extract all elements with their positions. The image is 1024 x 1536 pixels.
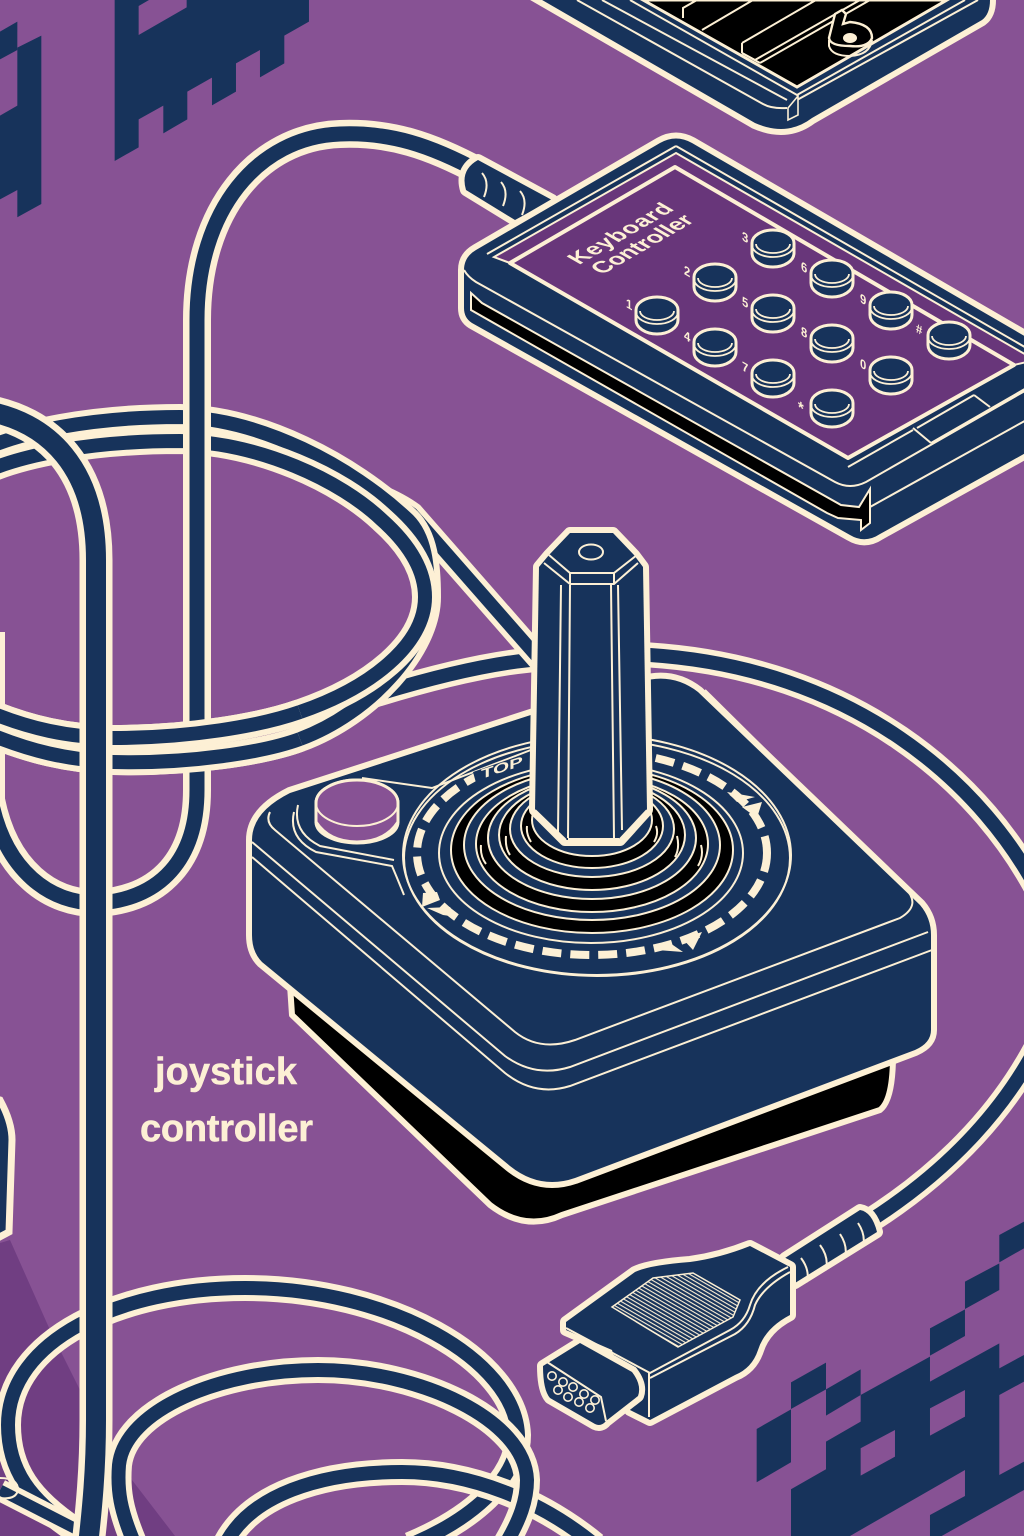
top console tray (530, 0, 990, 129)
pixel art: bottom right invader (757, 1222, 1024, 1536)
keyboard bezel strip (494, 153, 1024, 365)
fire button housing (293, 805, 404, 895)
TOP label (473, 752, 536, 790)
keyboard title: Keyboard (561, 199, 679, 268)
pixel art: top left invader (0, 0, 309, 217)
keypad numbers: 5 (742, 293, 748, 312)
joystick black base (290, 985, 893, 1222)
keypad numbers: 0 (860, 355, 866, 374)
shadow wedge (0, 1240, 175, 1536)
keypad numbers: 6 (801, 258, 807, 277)
keypad numbers: 8 (801, 323, 807, 342)
keyboard controller (464, 138, 1024, 539)
keypad numbers: 2 (684, 262, 690, 281)
plug body lines (566, 1267, 788, 1373)
joystick body edge lines (268, 690, 912, 1044)
plug grip hatch (612, 1273, 740, 1347)
plug ribs (801, 1223, 864, 1282)
connector plug (543, 1210, 877, 1425)
cable: loop front crossing over keyboard cable (0, 708, 300, 762)
keyboard strain relief (464, 160, 552, 220)
direction arrows (422, 792, 762, 952)
label: joystick controller: controller (140, 1108, 313, 1150)
keyboard title: Controller (584, 210, 700, 278)
cable: keyboard cable (0, 134, 480, 903)
keyboard front slot (471, 293, 870, 530)
cable: bottom coils (0, 1288, 595, 1536)
label: joystick controller: joystick (154, 1051, 298, 1093)
keypad numbers: 9 (860, 290, 866, 309)
cable: loop strands (0, 417, 428, 762)
cable: joystick cable to plug (375, 654, 1024, 1222)
joystick body (252, 679, 931, 1182)
keypad buttons (636, 230, 970, 427)
cable: front vertical cable (0, 410, 96, 1536)
keypad numbers: * (798, 397, 804, 420)
stepped boot rings (439, 763, 743, 943)
keypad numbers: 1 (626, 295, 632, 314)
keyboard edge lines (464, 270, 1024, 486)
keypad numbers (626, 228, 923, 420)
plug pin housing (543, 1343, 639, 1425)
plug body (566, 1246, 790, 1420)
plug strain relief (785, 1210, 877, 1283)
keyboard corner notches (913, 386, 1024, 443)
cable: straight strand behind stick (379, 496, 540, 660)
joystick stick (535, 533, 647, 840)
keypad numbers: 7 (742, 358, 748, 377)
keypad numbers: 4 (684, 327, 691, 346)
base rings (403, 735, 791, 976)
plug pins (548, 1372, 599, 1412)
left edge cut-off device (0, 1097, 12, 1242)
stick facets (535, 544, 647, 840)
TOP label: TOP (481, 753, 523, 782)
keypad numbers: # (916, 320, 923, 339)
joystick (252, 533, 932, 1222)
keyboard body (464, 138, 1024, 539)
keypad numbers: 3 (742, 228, 748, 247)
label: joystick controller (140, 1051, 313, 1150)
keyboard purple panel (510, 167, 1014, 458)
fire button (316, 780, 398, 843)
